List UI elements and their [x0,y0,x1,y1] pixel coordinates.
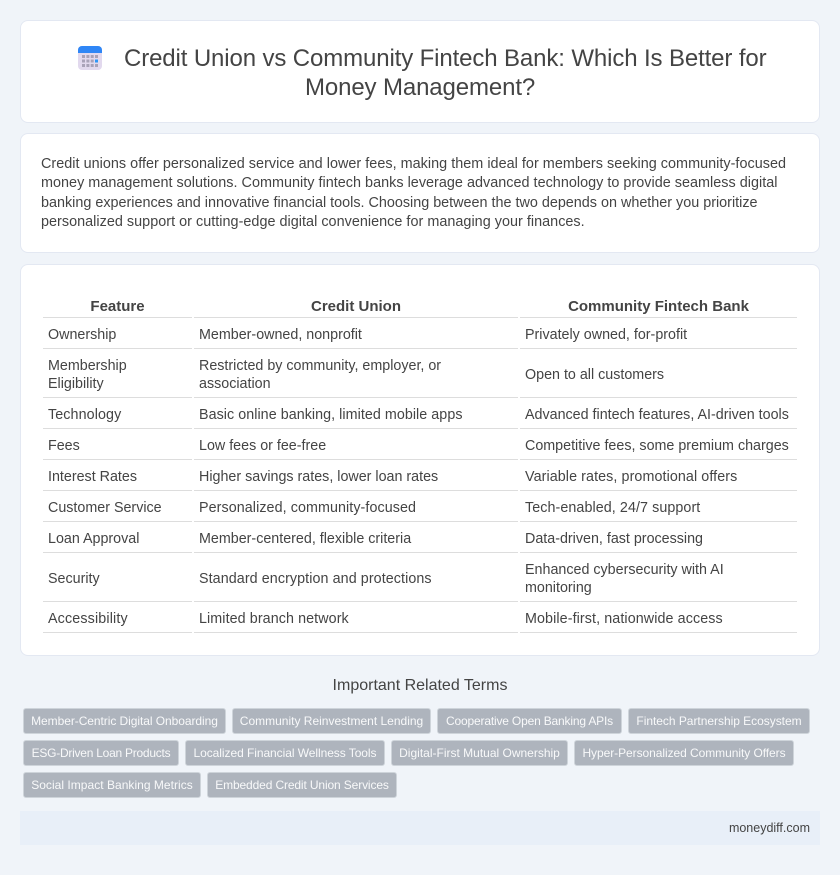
title: Credit Union vs Community Fintech Bank: Which Is Better for [124,45,766,72]
related term tags: ESG-Driven Loan Products [32,746,170,760]
comparison table: Feature [90,298,145,314]
comparison table: Ownership [48,327,116,343]
related term tags: Hyper-Personalized Community Offers [582,746,786,760]
comparison table [43,298,797,633]
comparison table: Restricted by community, employer, or [199,358,441,374]
comparison table: Accessibility [48,611,128,627]
heading: related terms: Important Related Terms [333,677,507,694]
related term tags: Social Impact Banking Metrics [31,778,193,792]
comparison table: Eligibility [48,376,104,392]
comparison table: Fees [48,438,80,454]
comparison table: Personalized, community-focused [199,500,416,516]
panel: header [20,20,820,123]
related term tags: Cooperative Open Banking APIs [446,714,613,728]
panel: intro text: banking experiences and innovative financial tools. Choosing between the two depends on whether you prioritize [41,195,758,211]
related term tags: Embedded Credit Union Services [215,778,389,792]
panel: intro text [20,133,820,253]
comparison table: Community Fintech Bank [568,298,749,314]
comparison table: Data-driven, fast processing [525,531,703,547]
panel: intro text: Credit unions offer personalized service and lower fees, making them ideal for members seeking community-focused [41,156,786,172]
related term tags [23,708,810,798]
related term tags: Community Reinvestment Lending [240,714,423,728]
comparison table: Credit Union [311,298,401,314]
title [124,45,766,101]
comparison table: association [199,376,271,392]
footer [20,811,820,845]
comparison table: Member-owned, nonprofit [199,327,362,343]
related term tags: Member-Centric Digital Onboarding [31,714,218,728]
comparison table: Technology [48,407,121,423]
comparison table: Enhanced cybersecurity with AI [525,562,724,578]
comparison table: Customer Service [48,500,162,516]
related term tags: Digital-First Mutual Ownership [399,746,560,760]
comparison table: Open to all customers [525,367,664,383]
panel: intro text: personalized support or cutting-edge digital convenience for managing your finances. [41,214,585,230]
comparison table: Privately owned, for-profit [525,327,687,343]
icon: calendar [78,46,102,70]
comparison table: Low fees or fee-free [199,438,326,454]
panel: comparison table [20,264,820,656]
comparison table: Interest Rates [48,469,137,485]
comparison table: Membership [48,358,127,374]
comparison table: Basic online banking, limited mobile apps [199,407,463,423]
footer source: moneydiff.com [729,821,810,835]
comparison table: Security [48,571,100,587]
panel: intro text: money management solutions. Community fintech banks leverage advanced technology to provide seamless digital [41,175,778,191]
related term tags: Fintech Partnership Ecosystem [636,714,802,728]
title: Money Management? [305,74,535,101]
comparison table: Limited branch network [199,611,349,627]
comparison table: Variable rates, promotional offers [525,469,737,485]
comparison table: Standard encryption and protections [199,571,432,587]
comparison table: Member-centered, flexible criteria [199,531,411,547]
related term tags: Localized Financial Wellness Tools [194,746,376,760]
comparison table: Mobile-first, nationwide access [525,611,723,627]
comparison table: monitoring [525,580,592,596]
comparison table: Advanced fintech features, AI-driven tools [525,407,789,423]
comparison table: Loan Approval [48,531,139,547]
comparison table: Tech-enabled, 24/7 support [525,500,700,516]
comparison table: Higher savings rates, lower loan rates [199,469,438,485]
comparison table: Competitive fees, some premium charges [525,438,789,454]
